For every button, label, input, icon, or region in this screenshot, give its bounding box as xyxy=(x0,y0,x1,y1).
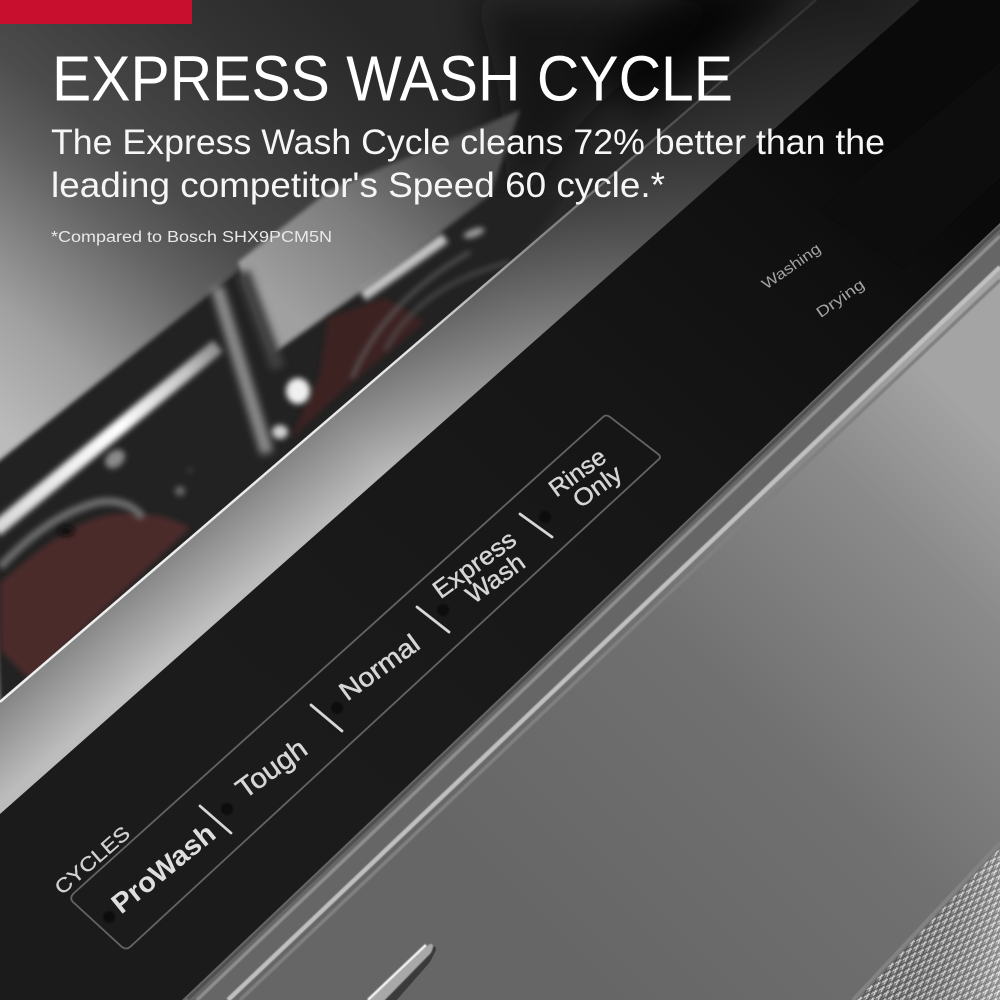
door interior, upper background xyxy=(0,0,814,700)
label: ProWash: ProWash xyxy=(105,817,221,920)
subtitle: The Express Wash Cycle cleans 72% better than the xyxy=(51,122,885,162)
label: Drying: Drying xyxy=(813,276,868,321)
title: EXPRESS WASH CYCLE xyxy=(52,42,733,114)
cycles selector outline xyxy=(71,416,660,948)
label: Normal: Normal xyxy=(333,628,425,706)
trim strip with bright edge xyxy=(183,223,1000,1000)
subtitle: leading competitor's Speed 60 cycle.* xyxy=(51,165,665,205)
label: Tough: Tough xyxy=(230,732,313,805)
label: Rinse: Rinse xyxy=(544,443,611,503)
label: Only: Only xyxy=(568,460,627,514)
label: CYCLES: CYCLES xyxy=(51,822,135,899)
footnote: *Compared to Bosch SHX9PCM5N xyxy=(51,229,332,246)
curved rack wire xyxy=(0,501,142,567)
cycle dividers xyxy=(200,514,552,833)
rack highlights xyxy=(58,378,310,536)
knurled grip texture xyxy=(853,843,1000,1000)
label: Wash: Wash xyxy=(461,548,531,610)
red dish, upper right xyxy=(290,298,425,440)
dish rack cavity xyxy=(0,110,560,710)
rack post xyxy=(243,272,278,368)
cycle indicator dots xyxy=(103,511,551,923)
subtitle xyxy=(51,122,885,205)
label: Express: Express xyxy=(428,525,522,604)
label: Washing: Washing xyxy=(759,240,824,293)
handle slot xyxy=(368,944,436,1000)
silver door band xyxy=(0,0,920,815)
upper rack bar and wires xyxy=(352,225,510,378)
display window xyxy=(820,62,1000,268)
red accent tab xyxy=(0,0,192,24)
lower door metal surface xyxy=(170,215,1000,1000)
rack bar xyxy=(0,346,218,530)
panel right of rack post xyxy=(238,110,520,353)
red dish, lower left xyxy=(0,513,190,680)
